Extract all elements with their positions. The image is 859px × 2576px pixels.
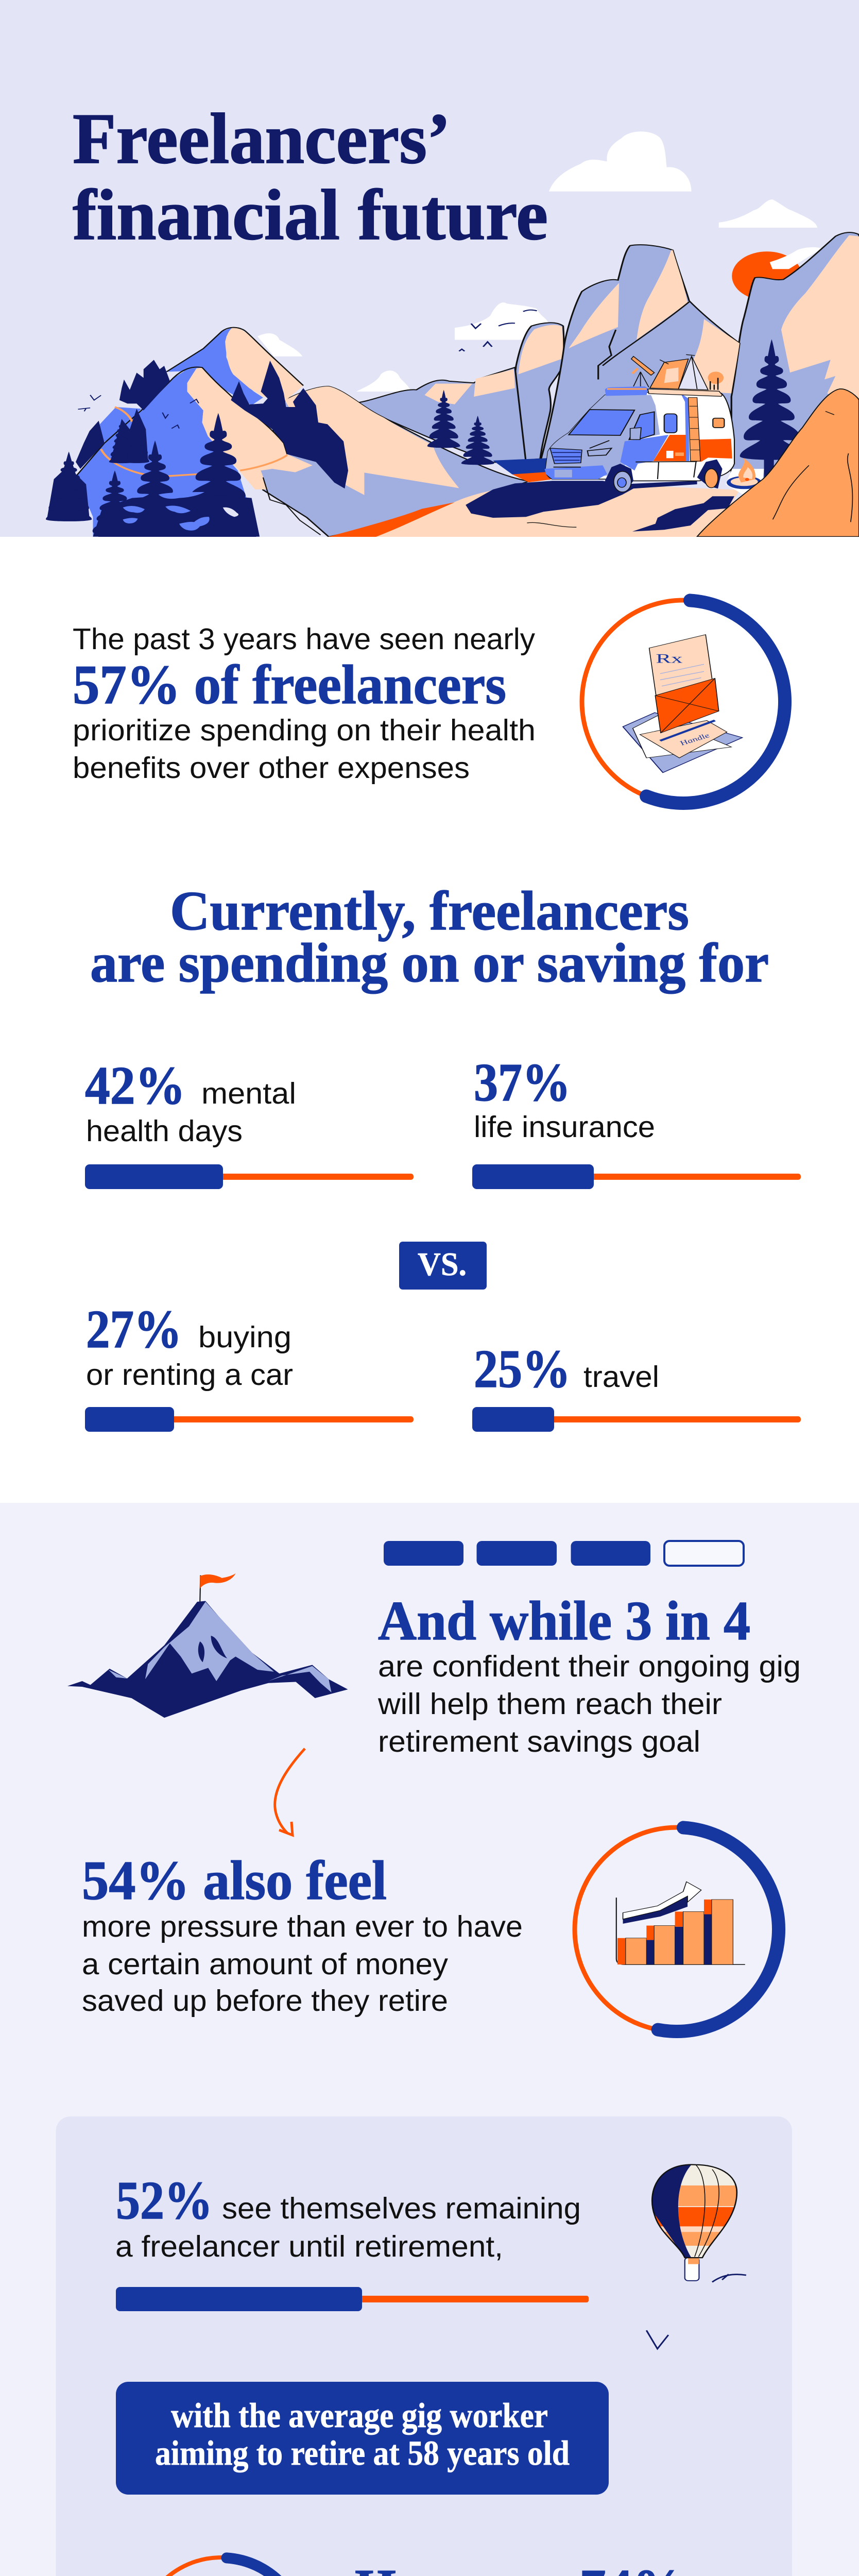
camper van, campfire, tree and rock: [466, 339, 859, 537]
stat: 37% life insurance: life insurance: [474, 1110, 655, 1144]
stat: 27% buying or renting a car: buying: [198, 1320, 291, 1354]
text block: and while 3 in 4: [377, 1590, 801, 1758]
icon: prescription and envelopes: Rx: [656, 651, 683, 666]
text block: 54% also feel: saved up before they retire: [82, 1984, 448, 2018]
text block: 52%: 52%: [116, 2170, 213, 2230]
panel: retirement section background: [0, 1503, 859, 2576]
text block: 52%: a freelancer until retirement,: [115, 2230, 503, 2263]
text block: 54% also feel: a certain amount of money: [82, 1947, 448, 1981]
stat: 37% life insurance: [472, 1052, 801, 1189]
heading: currently, freelancers: Currently, freelancers: [170, 880, 689, 942]
icon: rising bar chart: [616, 1882, 745, 1964]
illustration: mountain landscape with camper van: [46, 131, 859, 545]
text block: 57% of freelancers: The past 3 years have seen nearly: [73, 622, 535, 656]
text block: 57% of freelancers: [73, 622, 536, 785]
progress bar: 27%: [85, 1407, 414, 1432]
text block: 57% of freelancers: 57% of freelancers: [73, 654, 506, 716]
text block: 54% also feel: more pressure than ever to have: [82, 1910, 523, 1943]
callout: average retire at 58: [116, 2382, 609, 2495]
callout: average retire at 58: with the average gig worker: [171, 2396, 548, 2435]
progress bar: 42%: [85, 1164, 414, 1189]
stat: 27% buying or renting a car: 27%: [86, 1299, 182, 1359]
icon: hot air balloon: [651, 2164, 737, 2281]
callout: average retire at 58: aiming to retire at 58 years old: [155, 2433, 570, 2473]
donut ring: 54%: [568, 1821, 785, 2038]
pictogram: 3 in 4 blocks: [384, 1541, 744, 1566]
donut ring: 74%: [133, 2552, 310, 2576]
stat: 25% travel: [472, 1338, 801, 1432]
text block: 54% also feel: [82, 1850, 523, 2018]
panel: 57% health benefits: [73, 594, 792, 994]
stat: 42% mental health days: mental: [201, 1077, 296, 1110]
background mountains and clouds: [257, 131, 859, 538]
van accessories: telescope and tent: [631, 354, 724, 390]
badge: vs: [399, 1242, 487, 1290]
text block: 52%: [115, 2170, 581, 2263]
title: [73, 99, 548, 255]
panel: gig worker retirement: [56, 2116, 792, 2576]
pine tree: [740, 339, 798, 478]
heading: currently, freelancers: [90, 880, 769, 994]
text block: and while 3 in 4: And while 3 in 4: [378, 1590, 750, 1652]
title: Freelancers’: [73, 99, 451, 179]
badge: vs: VS.: [418, 1246, 467, 1282]
stat: 27% buying or renting a car: or renting a car: [86, 1358, 293, 1392]
text block: 57% of freelancers: benefits over other expenses: [73, 751, 470, 785]
text block: and while 3 in 4: will help them reach their: [377, 1687, 722, 1721]
heading: currently, freelancers: are spending on or saving for: [90, 933, 769, 994]
donut ring: 57%: [575, 594, 792, 810]
icon: prescription and envelopes: [623, 635, 742, 773]
stat: 25% travel: travel: [583, 1360, 659, 1394]
van wheels: [605, 460, 723, 494]
icon: prescription and envelopes: Handle: [677, 732, 712, 747]
icon: birds: [646, 2274, 746, 2349]
icon: mountain with flag: [67, 1573, 348, 1718]
text block: and while 3 in 4: retirement savings goal: [378, 1725, 700, 1758]
progress bar: 25%: [472, 1407, 801, 1432]
progress bar: 52%: [116, 2287, 589, 2311]
stat: 42% mental health days: health days: [86, 1114, 243, 1148]
text block: 57% of freelancers: prioritize spending on their health: [73, 714, 536, 747]
stat: 42% mental health days: [85, 1055, 414, 1189]
van body: [545, 386, 734, 481]
panel: hero: [0, 0, 859, 545]
text block: 54% also feel: 54% also feel: [82, 1850, 387, 1911]
arrow: curved down to 54%: [275, 1749, 305, 1835]
campfire: [727, 457, 762, 489]
text block: 52%: see themselves remaining: [222, 2192, 581, 2225]
text block: and while 3 in 4: are confident their ongoing gig: [378, 1650, 801, 1683]
title: financial future: [73, 175, 548, 255]
stat: 42% mental health days: 42%: [85, 1055, 185, 1115]
left mountains and pine trees: [46, 327, 348, 545]
stat: 27% buying or renting a car: [85, 1299, 414, 1432]
stat: 25% travel: 25%: [474, 1338, 571, 1399]
stat: 37% life insurance: 37%: [474, 1052, 571, 1112]
progress bar: 37%: [472, 1164, 801, 1189]
